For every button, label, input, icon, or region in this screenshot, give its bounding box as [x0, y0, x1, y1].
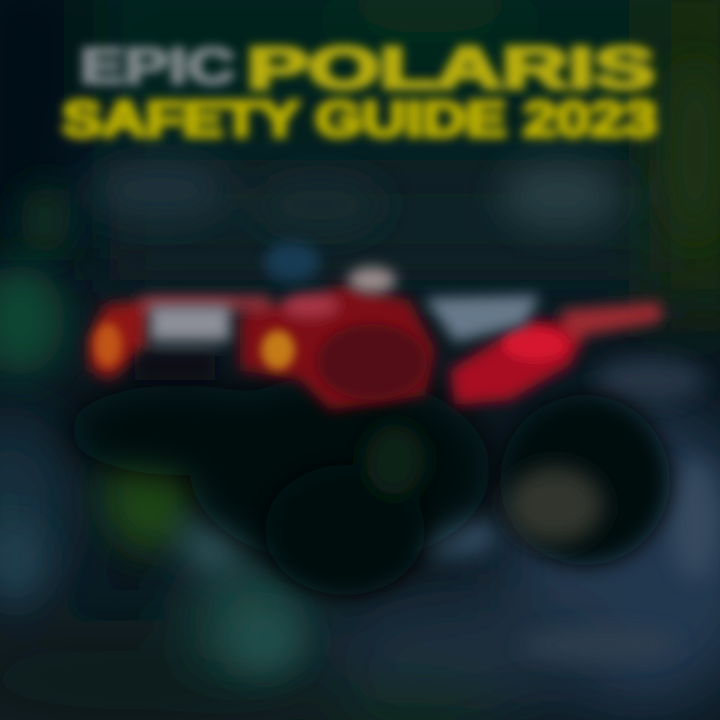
title: headline text: [62, 36, 657, 147]
ground highlights: [405, 358, 720, 661]
foreground foliage: [0, 265, 300, 670]
ATV: red bodywork: [88, 285, 662, 410]
ATV: seat, panels and handlebar: [135, 242, 540, 380]
title line 1 grey part: EPIC: [80, 38, 235, 94]
background rocks behind the vehicle: [20, 60, 720, 255]
title line 1 yellow part: POLARIS: [247, 36, 655, 101]
title line 2 yellow: SAFETY GUIDE 2023: [62, 91, 657, 147]
ATV: wheels and dark chassis: [70, 375, 670, 595]
